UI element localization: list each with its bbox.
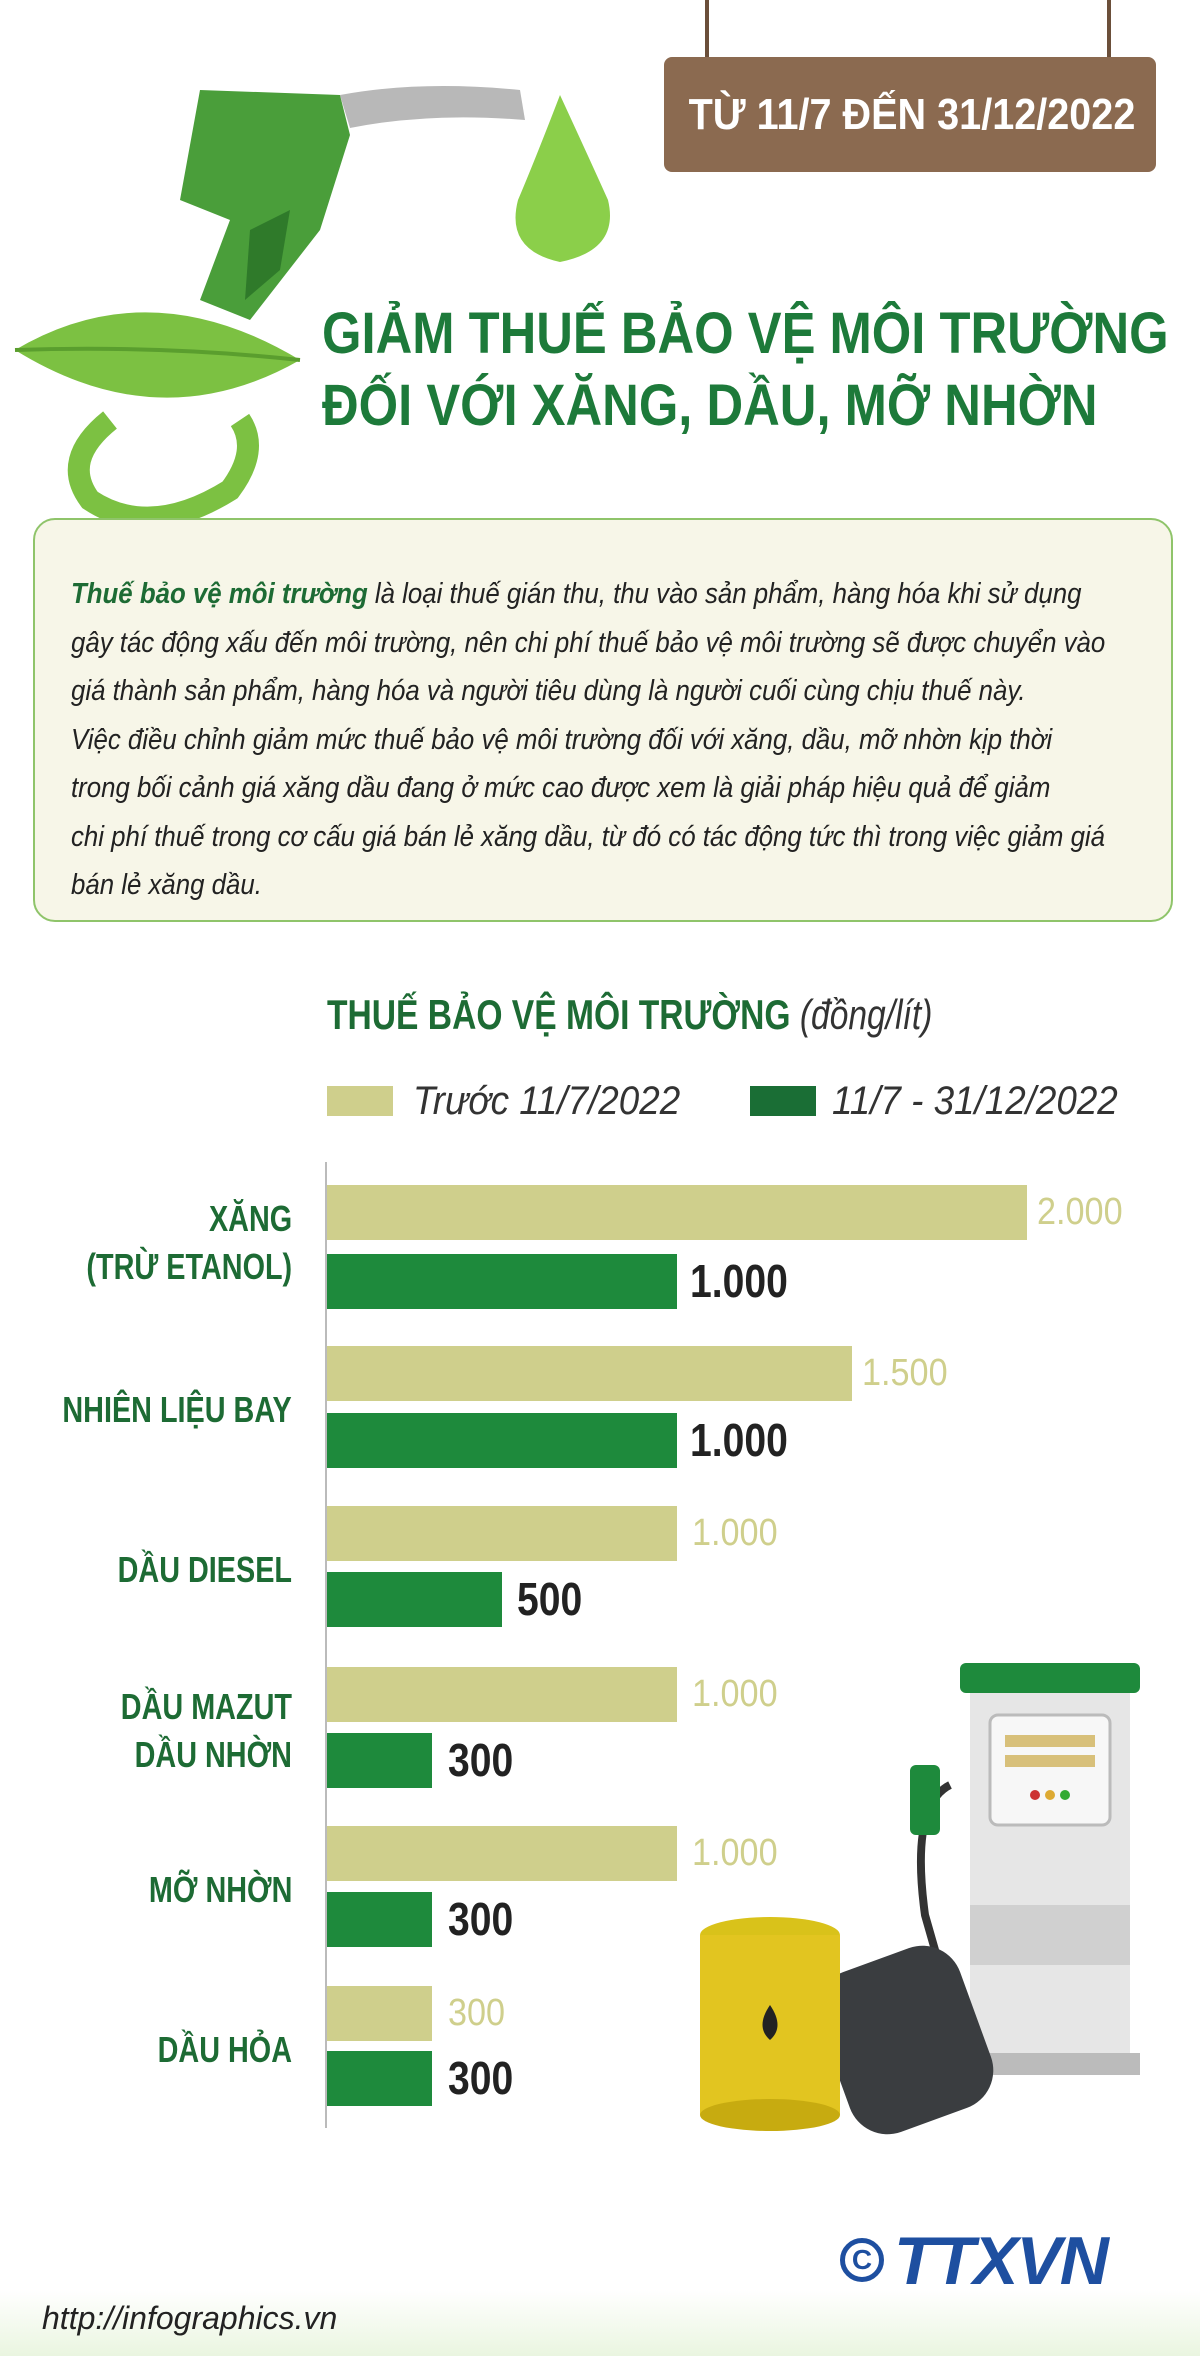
legend: Trước 11/7/2022 (413, 1079, 680, 1123)
row: mo nhon: 1.000 (692, 1832, 778, 1874)
logo: TTXVN: C (852, 2244, 872, 2275)
row: mo nhon: 300 (448, 1893, 513, 1945)
logo: TTXVN: TTXVN (894, 2223, 1107, 2299)
row: dau mazut: DẦU NHỜN (135, 1734, 292, 1775)
chart title: THUẾ BẢO VỆ MÔI TRƯỜNG (đồng/lít) (327, 991, 932, 1038)
row: xang: 1.000 (690, 1255, 788, 1307)
intro text box: chi phí thuế trong cơ cấu giá bán lẻ xăng dầu, từ đó có tác động tức thì trong việc giảm giá (71, 820, 1105, 852)
illustration: fuel nozzle with leaf (14, 86, 610, 518)
title: ĐỐI VỚI XĂNG, DẦU, MỠ NHỜN (322, 373, 1098, 438)
row: nhien lieu bay: 1.000 (690, 1414, 788, 1466)
row: xang: XĂNG (209, 1198, 292, 1239)
row: dau mazut: 1.000 (692, 1673, 778, 1715)
row: mo nhon: MỠ NHỜN (148, 1869, 292, 1910)
intro text box: Thuế bảo vệ môi trường là loại thuế gián thu, thu vào sản phẩm, hàng hóa khi sử dụng (71, 578, 1081, 610)
row: dau diesel: 500 (517, 1573, 582, 1625)
row: dau mazut: DẦU MAZUT (121, 1686, 292, 1727)
row: xang: (TRỪ ETANOL) (86, 1246, 292, 1287)
row: dau hoa: 300 (448, 1992, 505, 2034)
row: dau mazut (121, 1667, 778, 1788)
row: dau hoa: DẦU HỎA (158, 2029, 292, 2070)
intro text box: giá thành sản phẩm, hàng hóa và người tiêu dùng là người cuối cùng chịu thuế này. (71, 675, 1026, 707)
row: dau mazut: 300 (448, 1734, 513, 1786)
row: xang (86, 1185, 1123, 1309)
title: GIẢM THUẾ BẢO VỆ MÔI TRƯỜNG (322, 301, 1169, 366)
row: dau diesel: DẦU DIESEL (118, 1549, 292, 1590)
row: dau diesel: 1.000 (692, 1512, 778, 1554)
date signboard: TỪ 11/7 ĐẾN 31/12/2022 (689, 90, 1135, 139)
row: nhien lieu bay: NHIÊN LIỆU BAY (63, 1389, 292, 1430)
row: dau diesel (118, 1506, 778, 1627)
logo: TTXVN: Vietnam News Agency (990, 2288, 1120, 2303)
footer url (0, 2290, 1200, 2356)
intro text box: bán lẻ xăng dầu. (71, 869, 262, 901)
footer url: http://infographics.vn (42, 2300, 337, 2336)
intro text box: gây tác động xấu đến môi trường, nên chi phí thuế bảo vệ môi trường sẽ được chuyển vào (71, 626, 1105, 658)
row: dau hoa: 300 (448, 2052, 513, 2104)
legend: 11/7 - 31/12/2022 (832, 1079, 1118, 1123)
row: nhien lieu bay: 1.500 (862, 1352, 948, 1394)
illustration: fuel pump and barrels (700, 1663, 1140, 2134)
intro text box (33, 518, 1173, 922)
row: dau hoa (158, 1986, 513, 2106)
intro text box: Việc điều chỉnh giảm mức thuế bảo vệ môi trường đối với xăng, dầu, mỡ nhờn kịp thời (71, 724, 1052, 756)
legend (327, 1079, 1118, 1123)
date signboard (664, 0, 1156, 172)
title (322, 301, 1169, 438)
intro text box: trong bối cảnh giá xăng dầu đang ở mức cao được xem là giải pháp hiệu quả để giảm (71, 772, 1050, 804)
bar chart (325, 1162, 327, 2128)
row: mo nhon (148, 1826, 778, 1947)
row: xang: 2.000 (1037, 1191, 1123, 1233)
row: nhien lieu bay (63, 1346, 948, 1468)
